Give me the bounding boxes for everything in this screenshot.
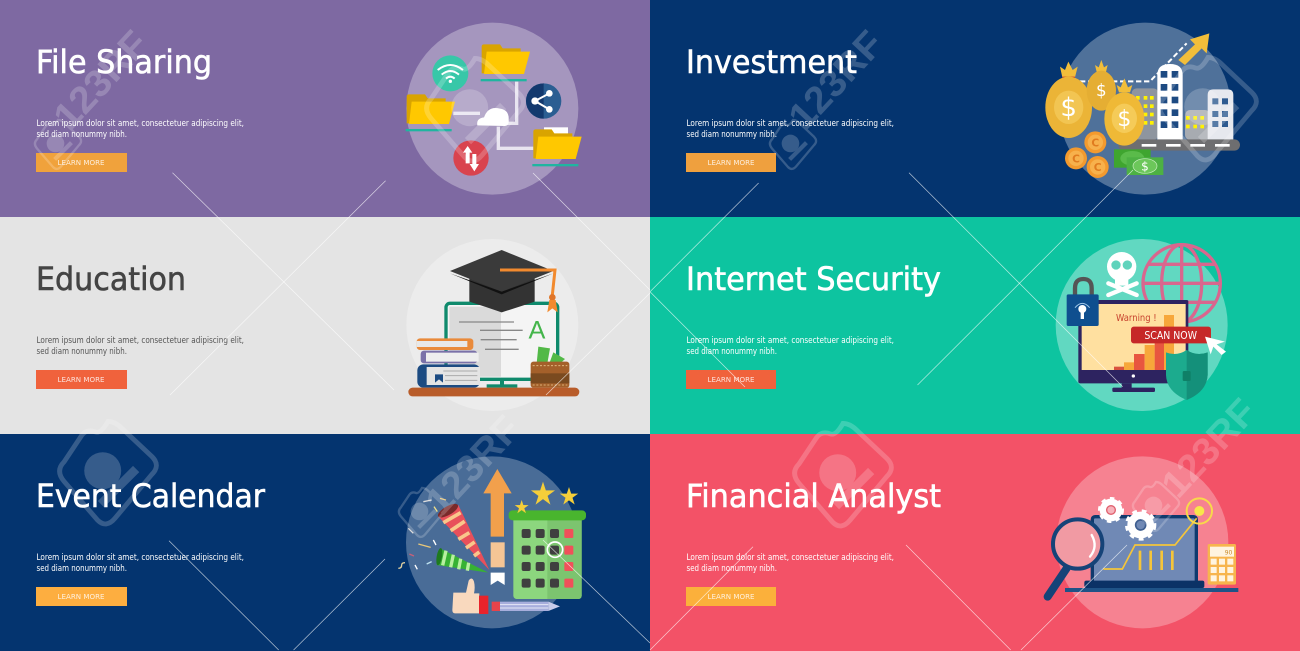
illustration: money bags and city: $ [1141, 159, 1149, 173]
watermark: 123RF text [46, 23, 1265, 523]
button: learn more: LEARN MORE [58, 592, 105, 601]
illustration: money bags and city: C [1091, 136, 1099, 149]
body text: Lorem ipsum dolor sit amet, consectetuer adipiscing elit, [686, 553, 894, 563]
illustration: security warning monitor: Warning ! [1116, 313, 1157, 324]
illustration: money bags and city: C [1072, 152, 1080, 165]
button: learn more [36, 587, 127, 606]
title: File Sharing: File Sharing [36, 43, 212, 81]
body text: Lorem ipsum dolor sit amet, consectetuer adipiscing elit, [36, 553, 244, 563]
panel: education [0, 217, 650, 434]
button: learn more [686, 587, 776, 606]
title: Investment: Investment [686, 43, 857, 81]
illustration: money bags and city: $ [1060, 93, 1077, 123]
body text: sed diam nonummy nibh. [686, 564, 777, 574]
body text: sed diam nonummy nibh. [686, 130, 777, 140]
panel: investment [650, 0, 1300, 217]
title: Financial Analyst: Financial Analyst [686, 477, 941, 515]
illustration: money bags and city [1045, 23, 1240, 195]
button: learn more [36, 370, 127, 389]
button: learn more [36, 153, 127, 172]
illustration: security warning monitor [1056, 239, 1228, 411]
watermark: 123RF text: 123RF [1154, 391, 1265, 506]
body text: sed diam nonummy nibh. [686, 347, 777, 357]
panel: financial analyst [650, 434, 1300, 651]
title: Education: Education [36, 260, 186, 298]
watermark: large icons [60, 57, 1256, 526]
watermark: 123RF text: 123RF [781, 23, 892, 138]
illustration: money bags and city: C [1094, 161, 1102, 174]
illustration: money bags and city: $ [1117, 107, 1131, 132]
illustration: graduation cap, monitor and books: A [529, 316, 546, 344]
body text: sed diam nonummy nibh. [36, 564, 127, 574]
panel: internet security [650, 217, 1300, 434]
illustration: graduation cap, monitor and books [406, 239, 579, 411]
body text: sed diam nonummy nibh. [36, 347, 127, 357]
illustration: money bags and city: $ [1096, 81, 1107, 100]
title: Internet Security: Internet Security [686, 260, 941, 298]
title: Event Calendar: Event Calendar [36, 477, 266, 515]
watermark: 123RF text: 123RF [418, 408, 529, 523]
illustration: laptop analytics and magnifier [1048, 456, 1238, 628]
illustration: laptop analytics and magnifier: 90 [1225, 549, 1233, 556]
illustration: calendar, party horns and thumbs up [398, 456, 586, 628]
illustration: file sharing network [406, 23, 582, 195]
body text: Lorem ipsum dolor sit amet, consectetuer adipiscing elit, [686, 119, 894, 129]
illustration: security warning monitor: SCAN NOW [1144, 329, 1197, 342]
button: learn more: LEARN MORE [708, 375, 755, 384]
button: learn more: LEARN MORE [708, 158, 755, 167]
panel: file sharing [0, 0, 650, 217]
watermark: small icons [35, 120, 1179, 537]
button: learn more [686, 153, 776, 172]
thin diagonal overlay lines [169, 170, 1133, 650]
button: learn more: LEARN MORE [58, 158, 105, 167]
body text: Lorem ipsum dolor sit amet, consectetuer adipiscing elit, [36, 119, 244, 129]
body text: Lorem ipsum dolor sit amet, consectetuer adipiscing elit, [686, 336, 894, 346]
button: learn more: LEARN MORE [58, 375, 105, 384]
button: learn more: LEARN MORE [708, 592, 755, 601]
body text: sed diam nonummy nibh. [36, 130, 127, 140]
watermark: 123RF text: 123RF [46, 23, 157, 138]
panel: event calendar [0, 434, 650, 651]
button: learn more [686, 370, 776, 389]
watermark overlay [35, 23, 1265, 537]
body text: Lorem ipsum dolor sit amet, consectetuer adipiscing elit, [36, 336, 244, 346]
